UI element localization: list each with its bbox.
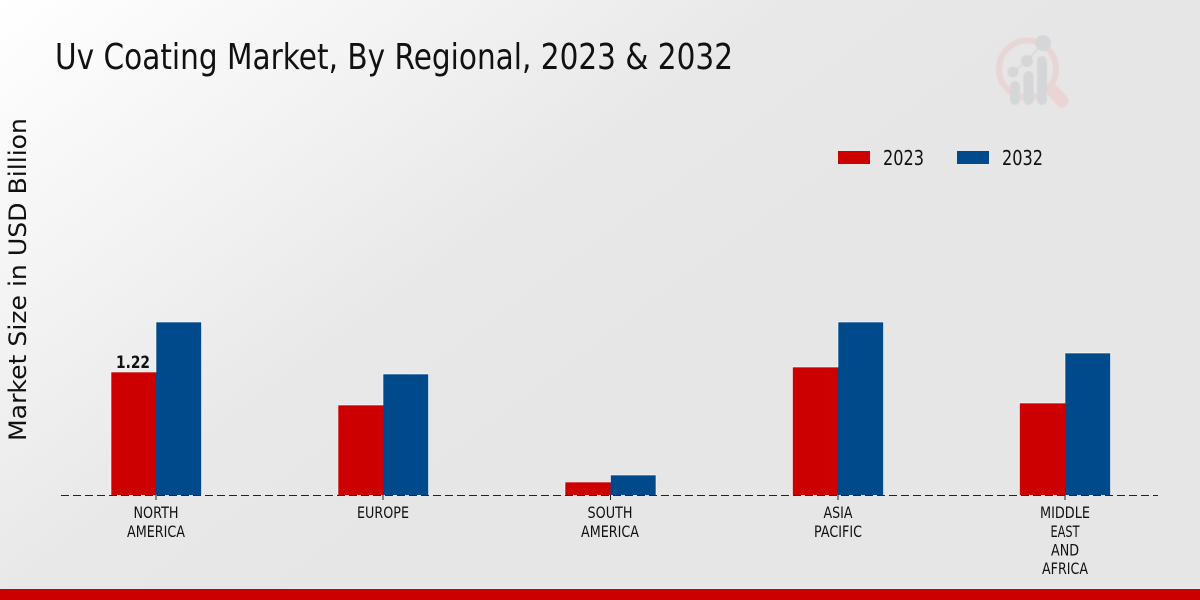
- bars: Asia Pacific: [792, 322, 884, 495]
- label: North America: AMERICA: [127, 522, 185, 541]
- legend: [838, 146, 1043, 170]
- bar chart: [61, 322, 1158, 500]
- label: Asia Pacific: ASIA: [824, 503, 853, 522]
- label: South America: AMERICA: [581, 522, 639, 541]
- label: Middle East and Africa: AFRICA: [1042, 559, 1088, 578]
- label: South America: SOUTH: [588, 503, 632, 522]
- label: Middle East and Africa: AND: [1051, 540, 1079, 560]
- label: Middle East and Africa: EAST: [1050, 522, 1080, 541]
- title: Uv Coating Market, By Regional, 2023 & 2032: [55, 37, 733, 78]
- legend item: 2032: [957, 146, 1043, 170]
- y axis label: Market Size in USD Billion: [4, 118, 32, 441]
- label: North America: NORTH: [134, 503, 178, 522]
- footer band: [0, 589, 1200, 600]
- bars: North America: [111, 322, 202, 495]
- bars: Europe: [338, 374, 428, 495]
- legend item: 2032: 2032: [1002, 146, 1043, 170]
- legend item: 2023: [838, 146, 924, 170]
- x axis labels: [127, 503, 1090, 578]
- label: Asia Pacific: PACIFIC: [814, 522, 862, 541]
- legend item: 2023: 2023: [883, 146, 924, 170]
- baseline: [61, 495, 1158, 500]
- bars: South America: [565, 475, 656, 495]
- bars: Middle East and Africa: [1020, 353, 1110, 495]
- label: Europe: EUROPE: [357, 503, 409, 522]
- icon: watermark logo: [999, 35, 1062, 105]
- data label: 1.22: 1.22: [116, 353, 150, 372]
- label: Middle East and Africa: MIDDLE: [1040, 503, 1090, 522]
